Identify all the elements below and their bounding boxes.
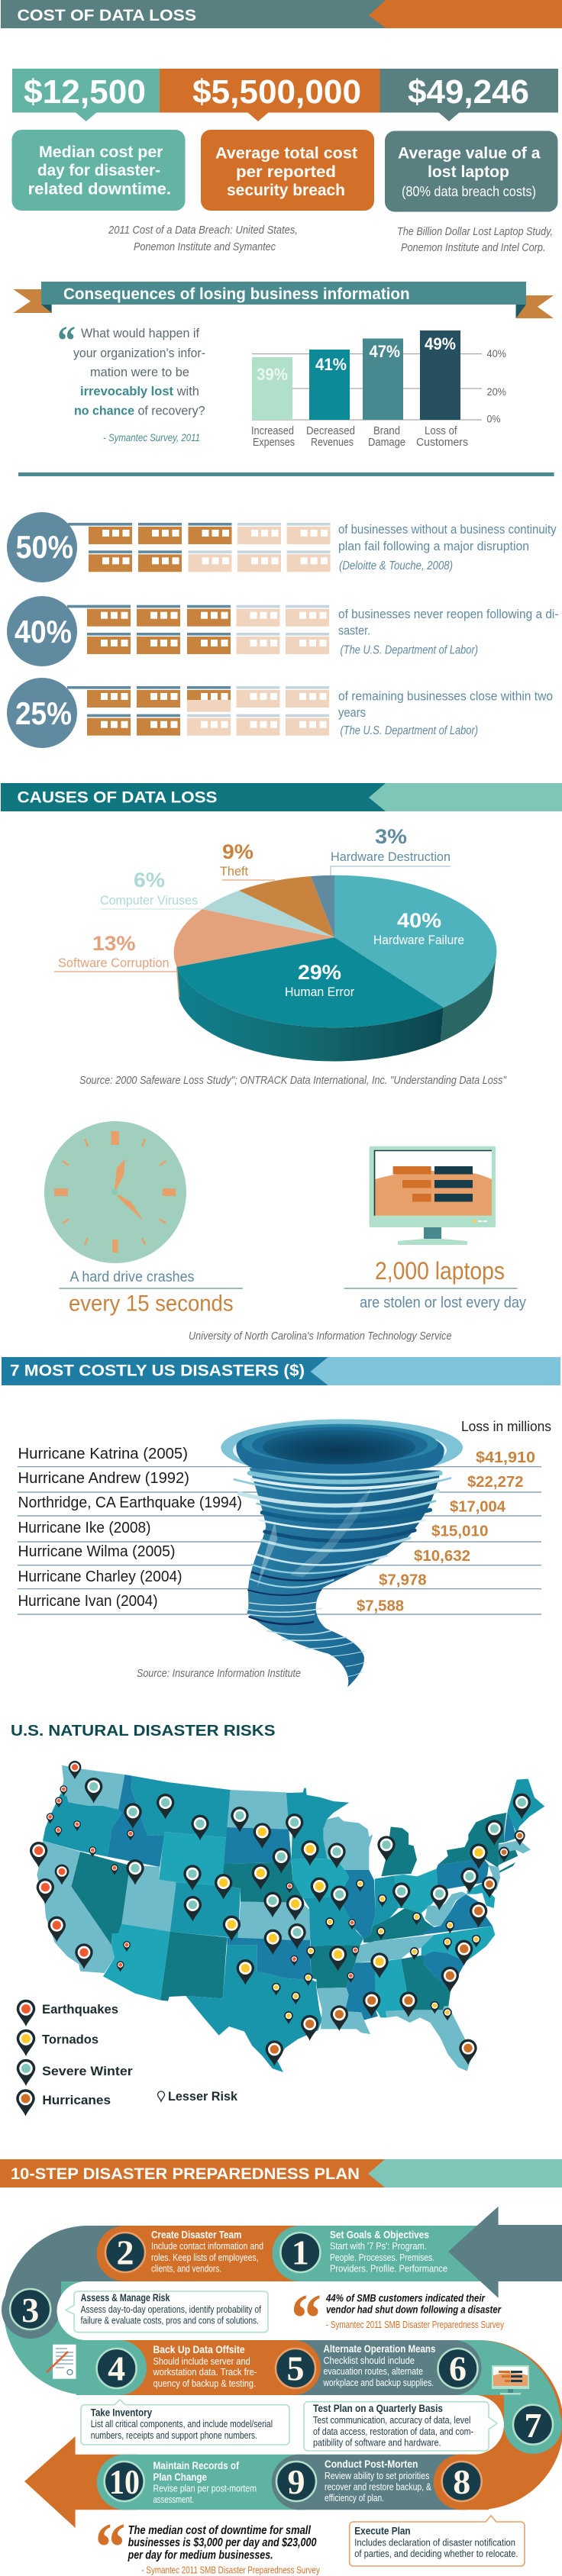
pull quote: what would happen: What would happen if <box>81 326 199 340</box>
step 4: back up data: workstation data. Track fre- <box>153 2366 257 2378</box>
table: disasters and losses: Hurricane Katrina (2005) <box>18 1446 188 1462</box>
label: software corruption: 13% <box>92 932 136 955</box>
step 3: assess and manage risk: failure & evaluate costs, pros and cons of solutions. <box>81 2315 259 2326</box>
table: disasters and losses: Hurricane Andrew (1992) <box>18 1470 189 1487</box>
card: median cost per day <box>12 130 185 211</box>
table: disasters and losses: Hurricane Ike (2008) <box>18 1520 151 1536</box>
table: disasters and losses: Hurricane Ivan (2004) <box>18 1593 157 1610</box>
table: disasters and losses <box>18 1419 551 1614</box>
step 3: assess and manage risk: 3 <box>21 2291 39 2329</box>
bar chart: consequences: 47% <box>370 342 400 361</box>
pull quote: what would happen: your organization's infor- <box>73 346 205 360</box>
map legend: Earthquakes <box>42 2002 118 2017</box>
step 4: back up data: 4 <box>108 2349 125 2388</box>
step 4: back up data <box>97 2344 257 2389</box>
icon: small monitor <box>492 2365 529 2395</box>
text: hard drive crashes: A hard drive crashes <box>70 1269 194 1285</box>
step 1: set goals: People. Processes. Premises. <box>330 2252 434 2263</box>
stat band: three dollar figures: $5,500,000 <box>192 73 361 111</box>
pull quote: what would happen: no chance of recovery? <box>74 403 205 418</box>
step 9: conduct post-mortem <box>276 2458 431 2503</box>
step 1: set goals: Start with '7 Ps': Program. <box>330 2240 427 2252</box>
step 2: create disaster team: clients, and vendors. <box>151 2263 221 2275</box>
quote: median cost of downtime: businesses is $3,000 per day and $23,000 <box>128 2536 317 2549</box>
callout: execute plan <box>350 2516 525 2566</box>
step 1: set goals: 1 <box>292 2233 309 2272</box>
bar chart: consequences: Customers <box>416 437 468 449</box>
step 4: back up data: Back Up Data Offsite <box>153 2344 245 2355</box>
ribbon heading: consequences <box>13 282 554 318</box>
amounts: losses in millions <box>357 1449 535 1615</box>
label: human error <box>285 961 354 999</box>
pins: eastern map <box>273 1794 531 2065</box>
pie chart: causes of data loss <box>54 825 496 1061</box>
section header: costly disasters: 7 MOST COSTLY US DISASTERS ($) <box>10 1362 305 1380</box>
label: hardware destruction: 3% <box>375 825 407 848</box>
callout: execute plan: of parties, and deciding whether to relocate. <box>354 2548 518 2559</box>
quote: vendor shutdown: - Symantec 2011 SMB Disaster Preparedness Survey <box>326 2319 504 2330</box>
source note: Ponemon and Symantec <box>108 224 298 253</box>
text: hard drive crashes: every 15 seconds <box>69 1291 234 1317</box>
map legend: Hurricanes <box>42 2093 111 2107</box>
pull quote: what would happen: “ <box>57 318 76 363</box>
flow path: serpentine arrow bands <box>2 2207 562 2528</box>
card: value of lost laptop: (80% data breach costs) <box>402 184 536 199</box>
card: average cost per breach: security breach <box>227 182 345 199</box>
amounts: losses in millions: $17,004 <box>450 1499 506 1516</box>
amounts: losses in millions: $41,910 <box>476 1449 535 1466</box>
label: software corruption <box>54 932 176 972</box>
source note: Ponemon and Symantec: 2011 Cost of a Data Breach: United States, <box>108 224 298 237</box>
step 7: test plan quarterly: Test communication, accuracy of data, level <box>313 2414 470 2426</box>
source note: Ponemon and Intel <box>397 225 553 254</box>
step 3: assess and manage risk: Assess & Manage Risk <box>81 2292 170 2304</box>
icon: monitor <box>370 1146 496 1245</box>
step 7: test plan quarterly: Test Plan on a Quarterly Basis <box>313 2403 443 2414</box>
callout: execute plan: Execute Plan <box>354 2526 411 2537</box>
statistic: 50 percent fail: (Deloitte & Touche, 2008) <box>339 559 453 572</box>
map legend: Tornados <box>42 2033 99 2047</box>
step 7: test plan quarterly: patibility of software and hardware. <box>313 2437 441 2449</box>
statistic: 25 percent close: years <box>338 705 366 720</box>
label: theft: 9% <box>222 840 254 863</box>
step 3: assess and manage risk: Assess day-to-day operations, identify probability of <box>81 2304 261 2315</box>
amounts: losses in millions: $10,632 <box>414 1548 470 1565</box>
map: United States with risk pins <box>30 1761 544 2072</box>
statistic: 50 percent fail: 50% <box>16 529 73 565</box>
step 3: assess and manage risk <box>10 2289 268 2333</box>
pins: western map <box>30 1761 283 2066</box>
section header: costly disasters <box>2 1357 560 1385</box>
step: take inventory: List all critical components, and include model/serial <box>91 2418 273 2429</box>
pull quote: what would happen <box>57 318 205 443</box>
card: average cost per breach <box>201 130 374 211</box>
step 7: test plan quarterly: of data access, restoration of data, and com- <box>313 2426 473 2437</box>
step 9: conduct post-mortem: efficiency of plan. <box>325 2492 384 2503</box>
label: human error: Human Error <box>285 985 354 999</box>
quote: median cost of downtime: per day for medium businesses. <box>128 2549 273 2561</box>
step 10: maintain records: Maintain Records of <box>153 2460 239 2471</box>
amounts: losses in millions: $7,588 <box>357 1598 404 1615</box>
card: value of lost laptop: lost laptop <box>428 163 509 181</box>
pull quote: what would happen: irrevocably lost with <box>80 384 199 398</box>
step 2: create disaster team: roles. Keep lists of employees, <box>151 2252 258 2263</box>
step 1: set goals <box>280 2229 447 2275</box>
step: take inventory: numbers, receipts and support phone numbers. <box>91 2429 257 2441</box>
card: average cost per breach: Average total cost <box>215 145 357 162</box>
step 1: set goals: Set Goals & Objectives <box>330 2229 429 2241</box>
step 5: alternate operation means: 5 <box>287 2349 304 2388</box>
label: hardware destruction <box>331 825 451 875</box>
bar chart: consequences: Damage <box>368 437 405 449</box>
step 10: maintain records: 10 <box>109 2462 140 2501</box>
section header: cost of data loss: COST OF DATA LOSS <box>17 7 196 24</box>
bar chart: consequences: Expenses <box>253 437 295 449</box>
card: value of lost laptop <box>385 131 557 212</box>
step 7: test plan quarterly: 7 <box>524 2406 542 2445</box>
step 8: number badge <box>442 2462 482 2501</box>
statistic: 40 percent never reopen <box>7 596 559 666</box>
ribbon heading: consequences: Consequences of losing business information <box>63 285 410 303</box>
statistic: 40 percent never reopen: saster. <box>338 624 370 638</box>
source note: UNC: University of North Carolina's Information Technology Service <box>189 1330 452 1343</box>
step 5: alternate operation means: evacuation routes, alternate <box>324 2365 423 2377</box>
pull quote: what would happen: mation were to be <box>90 365 189 379</box>
text: laptops stolen <box>344 1257 526 1311</box>
table: disasters and losses: Northridge, CA Earthquake (1994) <box>18 1494 242 1511</box>
step 5: alternate operation means: Alternate Operation Means <box>324 2343 435 2355</box>
pull quote: what would happen: - Symantec Survey, 2011 <box>103 431 200 443</box>
card: median cost per day: related downtime. <box>28 180 171 198</box>
step: take inventory <box>81 2400 289 2445</box>
eastern states <box>286 1779 544 2071</box>
card: median cost per day: Median cost per <box>39 143 163 161</box>
label: hardware failure <box>373 909 464 947</box>
step 9: conduct post-mortem: recover and restore backup, & <box>325 2481 431 2493</box>
quote: vendor shutdown <box>291 2281 504 2356</box>
step 1: set goals: Providers. Profile. Performance <box>330 2263 447 2275</box>
section header: causes of data loss: CAUSES OF DATA LOSS <box>17 789 217 807</box>
label: theft: Theft <box>220 864 248 879</box>
heading: natural disaster risks: U.S. NATURAL DISASTER RISKS <box>11 1723 276 1739</box>
section header: causes of data loss <box>1 783 562 811</box>
section header: ten step plan: 10-STEP DISASTER PREPAREDNESS PLAN <box>11 2165 360 2183</box>
statistic: 25 percent close: (The U.S. Department of Labor) <box>341 724 478 737</box>
step: take inventory: Take Inventory <box>91 2407 152 2419</box>
section header: cost of data loss <box>1 0 562 28</box>
bar chart: consequences <box>251 330 506 449</box>
bar chart: consequences: Loss of <box>425 425 457 437</box>
stat band: three dollar figures: $12,500 <box>24 73 146 111</box>
statistic: 50 percent fail: plan fail following a major disruption <box>338 539 529 553</box>
step 9: conduct post-mortem: Conduct Post-Morten <box>325 2458 418 2470</box>
quote: vendor shutdown: “ <box>291 2281 321 2356</box>
statistic: 50 percent fail <box>7 512 557 582</box>
step 2: create disaster team: Include contact information and <box>151 2240 263 2252</box>
map legend: Lesser Risk <box>168 2089 238 2104</box>
statistic: 40 percent never reopen: 40% <box>15 614 72 650</box>
label: hardware destruction: Hardware Destruction <box>331 850 451 864</box>
bar chart: consequences: 39% <box>257 365 288 384</box>
step 5: alternate operation means: Checklist should include <box>324 2355 415 2366</box>
card: value of lost laptop: Average value of a <box>398 145 541 162</box>
text: laptops stolen: are stolen or lost every day <box>360 1294 526 1311</box>
map legend: Severe Winter <box>42 2064 133 2078</box>
quote: median cost of downtime: - Symantec 2011 SMB Disaster Preparedness Survey <box>141 2565 320 2576</box>
bar chart: consequences: 40% <box>487 347 506 359</box>
quote: median cost of downtime: The median cost of downtime for small <box>128 2524 311 2537</box>
quote: median cost of downtime <box>95 2510 320 2576</box>
step 5: alternate operation means <box>276 2343 435 2388</box>
text: hard drive crashes <box>60 1269 243 1317</box>
label: human error: 29% <box>298 961 341 984</box>
step 7: test plan quarterly <box>304 2402 553 2451</box>
step 4: back up data: quency of backup & testing. <box>153 2378 256 2389</box>
text: laptops stolen: 2,000 laptops <box>375 1257 505 1285</box>
table: disasters and losses: Hurricane Charley (2004) <box>18 1568 182 1585</box>
bar chart: consequences: 0% <box>487 412 501 424</box>
statistic: 40 percent never reopen: (The U.S. Department of Labor) <box>341 644 478 657</box>
step 6: number badge <box>438 2349 478 2388</box>
label: computer viruses: Computer Viruses <box>100 893 198 908</box>
amounts: losses in millions: $15,010 <box>431 1523 488 1540</box>
label: hardware failure: 40% <box>397 909 441 932</box>
step 10: maintain records: Plan Change <box>153 2471 207 2483</box>
source note: insurance institute: Source: Insurance Information Institute <box>137 1667 301 1680</box>
bar chart: consequences: Revenues <box>311 437 354 449</box>
illustration: tornado <box>221 1419 463 1688</box>
icon: document with pencil <box>47 2345 76 2379</box>
bar chart: consequences: 41% <box>315 355 347 374</box>
step 6: number badge: 6 <box>449 2349 467 2388</box>
western states <box>37 1765 322 2072</box>
step 9: conduct post-mortem: 9 <box>287 2462 305 2501</box>
label: computer viruses <box>100 869 202 909</box>
step 5: alternate operation means: workplace and backup supplies. <box>323 2377 434 2388</box>
quote: vendor shutdown: 44% of SMB customers indicated their <box>325 2292 486 2304</box>
bar chart: consequences: Increased <box>251 425 294 437</box>
label: theft <box>220 840 275 880</box>
step 2: create disaster team <box>105 2229 263 2275</box>
stat band: three dollar figures: $49,246 <box>408 73 529 111</box>
step 10: maintain records: Revise plan per post-mortem <box>153 2483 257 2494</box>
step 2: create disaster team: 2 <box>116 2233 134 2272</box>
source note: Ponemon and Symantec: Ponemon Institute and Symantec <box>134 240 276 253</box>
bar chart: consequences: Decreased <box>306 425 355 437</box>
step 2: create disaster team: Create Disaster Team <box>151 2229 241 2241</box>
label: software corruption: Software Corruption <box>58 956 170 970</box>
bar chart: consequences: Brand <box>373 425 400 437</box>
step 9: conduct post-mortem: Review ability to set priorities <box>325 2470 430 2481</box>
table: disasters and losses: Hurricane Wilma (2005) <box>18 1543 176 1560</box>
section header: ten step plan <box>0 2159 562 2188</box>
map legend <box>16 2000 238 2117</box>
card: median cost per day: day for disaster- <box>37 162 160 179</box>
step 8: number badge: 8 <box>453 2462 470 2501</box>
statistic: 25 percent close <box>7 678 553 748</box>
label: computer viruses: 6% <box>134 869 165 891</box>
bar chart: consequences: 20% <box>487 385 506 398</box>
callout: execute plan: Includes declaration of disaster notification <box>354 2537 515 2549</box>
step 4: back up data: Should include server and <box>153 2355 250 2367</box>
quote: vendor shutdown: vendor had shut down following a disaster <box>326 2304 502 2316</box>
amounts: losses in millions: $7,978 <box>379 1572 427 1589</box>
card: average cost per breach: per reported <box>236 163 336 181</box>
stat band: three dollar figures <box>12 69 558 121</box>
statistic: 25 percent close: 25% <box>15 695 72 731</box>
bar chart: consequences: 49% <box>425 334 456 353</box>
icon: clock <box>44 1121 186 1263</box>
table: disasters and losses: Loss in millions <box>461 1419 551 1434</box>
step 10: maintain records <box>105 2460 257 2505</box>
label: hardware failure: Hardware Failure <box>373 933 464 947</box>
step 10: maintain records: assessment. <box>153 2494 194 2505</box>
amounts: losses in millions: $22,272 <box>467 1474 524 1491</box>
